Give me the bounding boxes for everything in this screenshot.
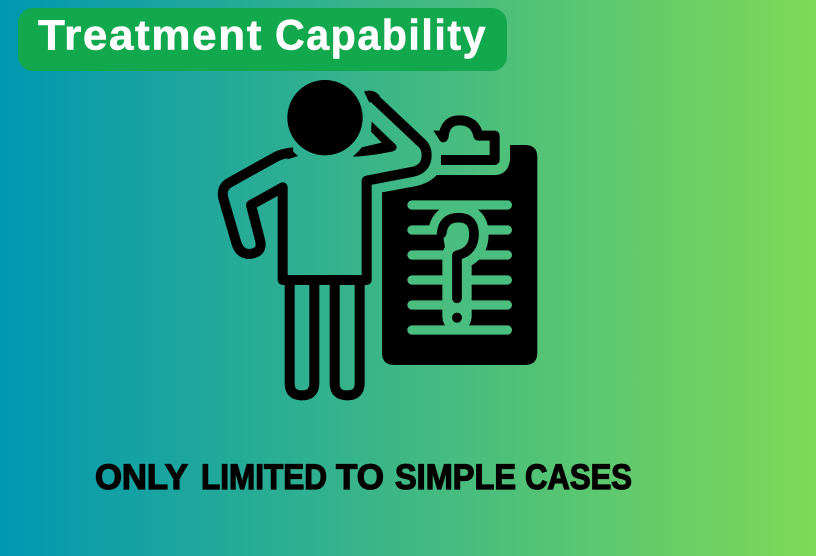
title: Treatment xyxy=(38,12,263,60)
title banner xyxy=(18,8,507,71)
icon: clipboard xyxy=(382,120,537,365)
caption: CASES xyxy=(525,458,632,497)
title: Capability xyxy=(275,12,487,60)
title xyxy=(38,12,487,60)
icon: person with question clipboard xyxy=(223,80,537,395)
caption: LIMITED xyxy=(201,458,327,497)
caption: TO xyxy=(336,458,384,497)
icon: question mark xyxy=(442,218,474,332)
caption xyxy=(95,458,632,497)
icon: person xyxy=(223,80,427,395)
caption: SIMPLE xyxy=(395,458,516,497)
caption: ONLY xyxy=(95,458,188,497)
